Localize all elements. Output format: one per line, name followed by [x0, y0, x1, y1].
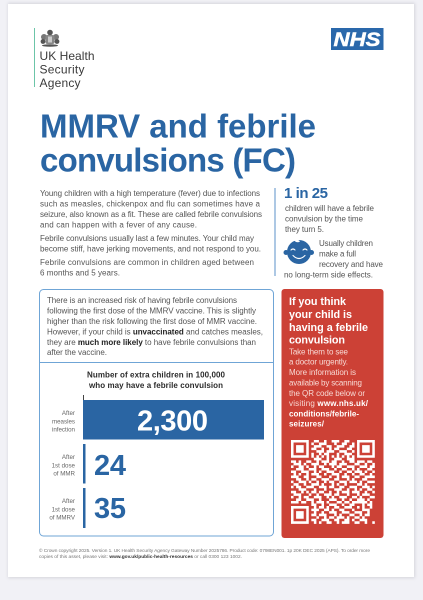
bar: after 1st dose of MMR 24: After	[62, 454, 75, 461]
logo: UK Health Security Agency: UK Health	[40, 49, 94, 63]
callout text: conditions/febrile-	[289, 410, 359, 418]
bar: after measles infection 2,300: After	[62, 410, 75, 417]
text block: introduction: 6 months and 5 years.	[40, 268, 120, 278]
callout heading: If you think	[289, 296, 347, 308]
footer: copyright: copies of this asset, please visit: www.gov.uk/public-health-resources or call 0300 123 1002.	[39, 554, 242, 560]
statistic text: Usually children	[319, 239, 373, 248]
callout heading	[289, 296, 368, 346]
chart heading: Number of extra children in 100,000	[87, 370, 226, 380]
text block: introduction: become stiff, have jerking movements, and not respond to you.	[40, 244, 261, 254]
text block: increased risk: following the first dose of the MMRV vaccine. This is slightly	[47, 306, 256, 316]
text block: increased risk: However, if your child is unvaccinated and catches measles,	[47, 328, 263, 336]
logo: UK Health Security Agency: Security	[40, 62, 84, 76]
statistic text: recovery and have	[319, 260, 384, 269]
statistic text: no long-term side effects.	[284, 270, 373, 280]
bar: after 1st dose of MMR 24: of MMR	[53, 470, 76, 478]
bar chart: extra children	[49, 395, 264, 528]
text block: introduction: Febrile convulsions usually last a few minutes. Your child may	[40, 234, 254, 243]
logo: NHS: NHS	[334, 29, 380, 51]
footer: copyright	[39, 547, 370, 560]
QR code	[291, 441, 375, 523]
callout heading: convulsion	[289, 334, 345, 346]
bar: after 1st dose of MMRV 35: 35	[94, 493, 126, 525]
statistic text	[284, 204, 384, 280]
chart heading: who may have a febrile convulsion	[88, 381, 223, 390]
bar: after measles infection 2,300	[52, 400, 264, 440]
title: MMRV and febrile	[40, 108, 316, 144]
text block: increased risk: There is an increased risk of having febrile convulsions	[47, 296, 237, 305]
callout text: seizures/	[289, 420, 325, 428]
panel: 1 in 25 statistic	[274, 185, 384, 280]
bar: after 1st dose of MMRV 35	[49, 488, 126, 528]
callout heading: having a febrile	[289, 322, 368, 334]
icon: royal crest	[41, 30, 59, 47]
statistic text: convulsion by the time	[285, 214, 364, 224]
callout text: available by scanning	[289, 378, 362, 388]
text block: introduction: seizure, also known as a fit. These are called febrile convulsions	[40, 210, 262, 219]
chart heading	[87, 370, 226, 390]
callout text	[289, 348, 369, 428]
text block: introduction: Febrile convulsions are common in children aged between	[40, 258, 254, 267]
icon: smiling baby	[284, 240, 314, 264]
logo: UK Health Security Agency	[34, 28, 94, 90]
statistic heading: 1 in 25	[284, 185, 328, 202]
bar: after measles infection 2,300: infection	[52, 426, 76, 434]
statistic text: make a full	[319, 250, 356, 258]
statistic text: children will have a febrile	[285, 204, 375, 213]
logo: UK Health Security Agency: Agency	[40, 76, 80, 90]
statistic text: they turn 5.	[285, 225, 324, 234]
text block: increased risk: after the vaccine.	[47, 348, 107, 357]
bar: after 1st dose of MMR 24: 24	[94, 450, 126, 482]
footer: copyright: © Crown copyright 2025. Version 1. UK Health Security Agency Gateway Number 2025786. Product code: 0798EN001. 1p 20K DEC 2025 (APS). To order more	[39, 547, 370, 554]
bar: after 1st dose of MMRV 35: After	[62, 498, 75, 505]
text block: introduction: Young children with a high temperature (fever) due to infections	[40, 189, 260, 198]
title	[40, 108, 316, 178]
callout text: visiting www.nhs.uk/	[289, 399, 369, 408]
title: convulsions (FC)	[40, 142, 296, 178]
bar: after 1st dose of MMR 24	[52, 444, 126, 484]
text block: introduction	[40, 189, 262, 278]
callout text: the QR code below or	[289, 389, 365, 398]
callout text: a doctor urgently.	[289, 358, 348, 366]
bar: after 1st dose of MMRV 35: 1st dose	[52, 506, 76, 514]
text block: introduction: such as measles, chickenpox and flu can sometimes have a	[40, 200, 261, 208]
text block: introduction: and can happen with a fever of any cause.	[40, 220, 197, 230]
text block: increased risk	[47, 296, 263, 357]
bar: after measles infection 2,300: measles	[52, 418, 75, 426]
panel: what to do callout	[282, 289, 384, 538]
callout text: Take them to see	[289, 348, 349, 356]
callout heading: your child is	[289, 309, 352, 321]
bar: after 1st dose of MMR 24: 1st dose	[52, 462, 76, 470]
panel: risk information and chart	[40, 290, 274, 536]
bar: after measles infection 2,300: 2,300	[137, 406, 208, 438]
callout text: More information is	[289, 368, 356, 377]
text block: increased risk: higher than the risk following the first dose of MMR vaccine.	[47, 317, 257, 326]
bar: after 1st dose of MMRV 35: of MMRV	[49, 514, 76, 522]
text block: increased risk: they are much more likely to have febrile convulsions than	[47, 338, 256, 347]
